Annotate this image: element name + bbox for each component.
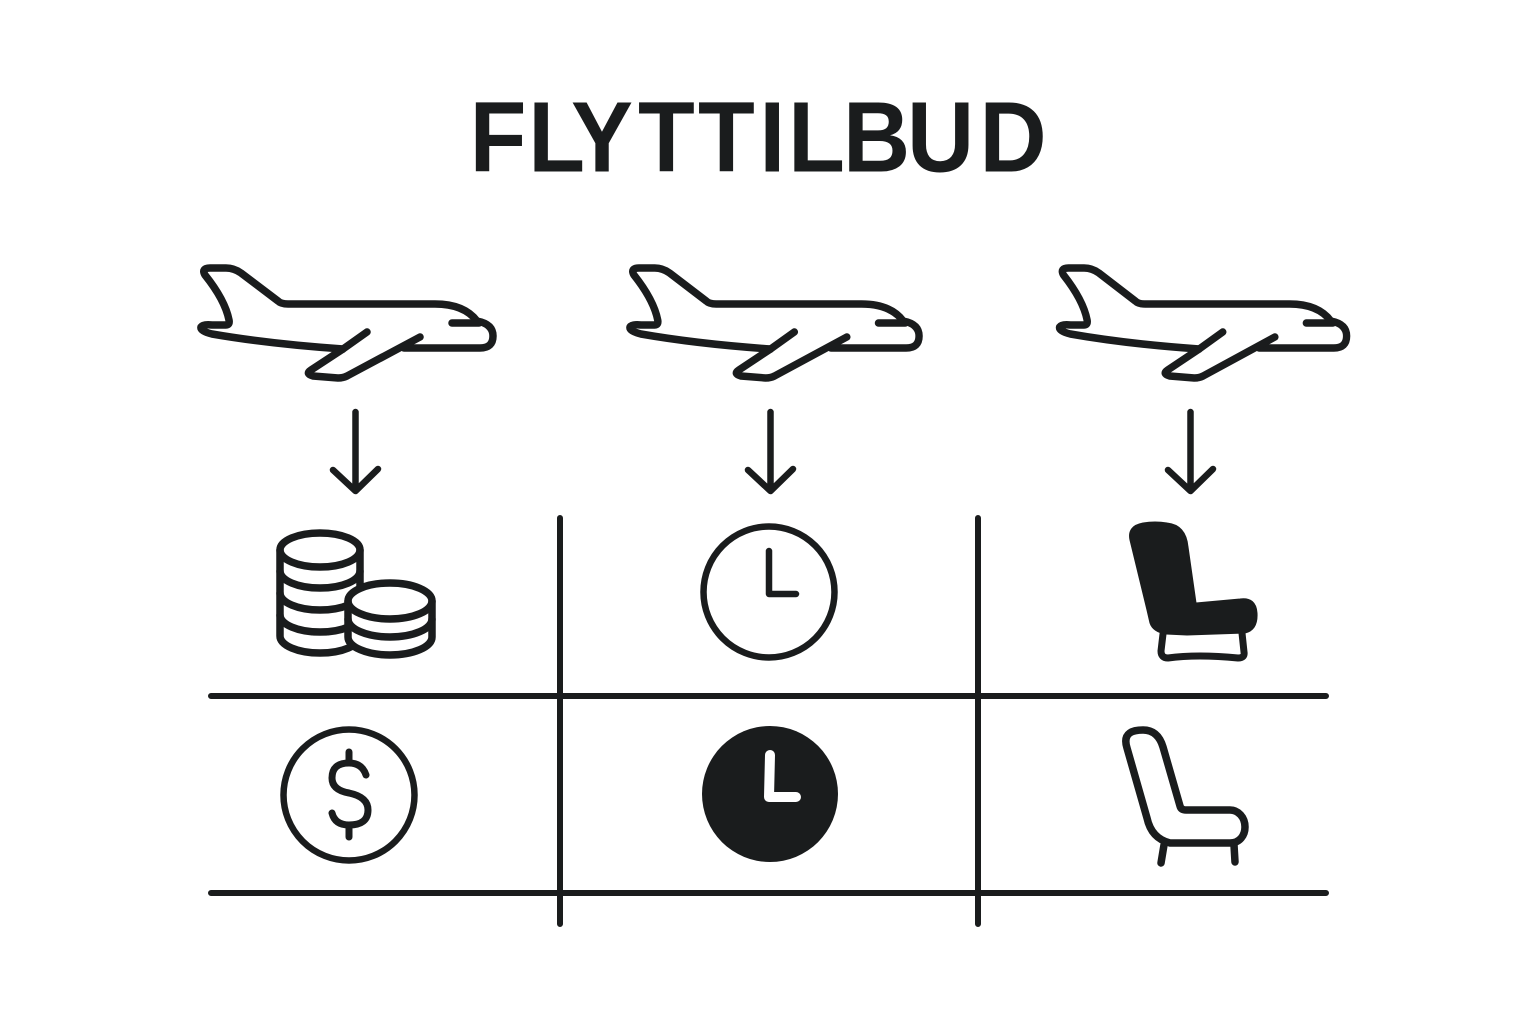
icon: coin stacks [280,533,432,655]
arrow: left [333,412,378,491]
arrow: right [1168,412,1213,491]
icon: dollar coin [284,730,414,860]
icon: filled seat [1130,522,1257,658]
icon: plane left [201,268,493,378]
icon: plane right [1060,268,1347,378]
icon: plane center [630,268,919,378]
icon: filled clock [702,726,838,862]
title: FLYTTILBUD [470,82,1047,193]
arrow: center [748,412,793,491]
grid lines [211,518,1326,924]
icon: clock outline [704,526,834,658]
icon: outline seat [1126,730,1245,863]
